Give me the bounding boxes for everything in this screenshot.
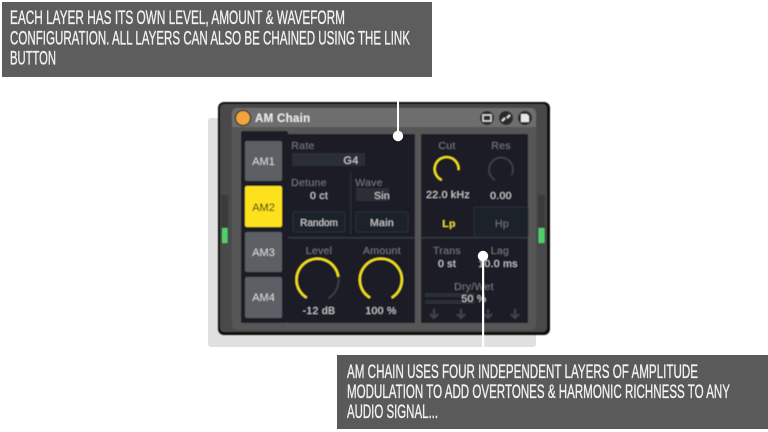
callout connector: overview xyxy=(478,251,488,356)
trans control: Trans xyxy=(433,245,461,257)
lag control: Lag xyxy=(491,245,509,257)
dry/wet control: Dry/Wet xyxy=(454,281,494,293)
icon: view button xyxy=(480,111,494,125)
panel: level and amount xyxy=(288,238,415,323)
rate control: G4 xyxy=(343,155,359,167)
low-pass button: Lp xyxy=(442,218,456,230)
rate control: Rate xyxy=(291,140,315,152)
callout: layer configuration: EACH LAYER HAS ITS OWN LEVEL, AMOUNT & WAVEFORM xyxy=(10,7,345,29)
lag control: 10.0 ms xyxy=(478,258,518,270)
tab AM2 active xyxy=(245,186,282,227)
left level meter xyxy=(221,195,228,243)
trans control: 0 st xyxy=(438,258,456,270)
icon: device power button xyxy=(236,110,250,126)
panel: trans, lag and dry/wet xyxy=(421,238,528,323)
res knob xyxy=(489,140,513,202)
tab AM1 xyxy=(245,141,282,181)
amount knob: Amount xyxy=(363,245,401,257)
icon: link button xyxy=(499,111,513,125)
amount knob xyxy=(360,245,402,317)
level knob: -12 dB xyxy=(303,305,335,317)
tab AM2 active: AM2 xyxy=(252,202,275,214)
cut knob: Cut xyxy=(438,140,456,152)
device frame xyxy=(218,102,550,335)
main button: Main xyxy=(370,217,394,229)
rate control xyxy=(291,140,365,167)
detune control xyxy=(291,177,328,202)
right level meter xyxy=(538,195,545,243)
cut knob: 22.0 kHz xyxy=(426,189,470,201)
res knob: Res xyxy=(491,140,511,152)
level knob: Level xyxy=(306,245,332,257)
tab AM4 xyxy=(245,277,282,318)
tab AM3 xyxy=(245,232,282,272)
amount knob: 100 % xyxy=(365,305,397,317)
tab AM1: AM1 xyxy=(252,156,275,168)
lag control xyxy=(478,245,518,270)
dry/wet control xyxy=(425,281,494,305)
callout: layer configuration: CONFIGURATION. ALL LAYERS CAN ALSO BE CHAINED USING THE LINK xyxy=(10,28,410,50)
tab AM4: AM4 xyxy=(252,292,275,304)
detune control: 0 ct xyxy=(310,190,328,202)
cut knob xyxy=(426,140,470,201)
title bar xyxy=(232,108,536,127)
callout connector: layers xyxy=(393,77,403,141)
level knob xyxy=(297,245,339,317)
panel: AM Chain device xyxy=(218,102,550,335)
high-pass button: Hp xyxy=(495,218,509,230)
wave control: Wave xyxy=(355,177,383,189)
panel: layer tabs xyxy=(241,131,288,323)
wave control: Sin xyxy=(374,190,390,202)
random button: Random xyxy=(300,218,338,229)
wave control xyxy=(355,177,390,202)
left section backing xyxy=(288,134,415,323)
panel: rate and waveform xyxy=(288,134,415,237)
dry/wet control: 50 % xyxy=(461,293,487,305)
device name: AM Chain xyxy=(255,113,310,125)
section divider xyxy=(350,172,352,234)
icon: save button xyxy=(518,111,532,125)
icon: output arrows xyxy=(430,309,519,318)
callout: AM Chain overview xyxy=(337,355,768,429)
callout: layer configuration xyxy=(2,2,432,77)
device drop shadow xyxy=(208,118,536,347)
detune control: Detune xyxy=(291,177,327,189)
trans control xyxy=(433,245,461,270)
tab AM3: AM3 xyxy=(252,247,275,259)
callout: AM Chain overview: AUDIO SIGNAL... xyxy=(347,401,438,423)
panel: filter xyxy=(421,134,528,237)
right section backing xyxy=(421,134,528,323)
callout: layer configuration: BUTTON xyxy=(10,48,56,70)
res knob: 0.00 xyxy=(490,190,512,202)
